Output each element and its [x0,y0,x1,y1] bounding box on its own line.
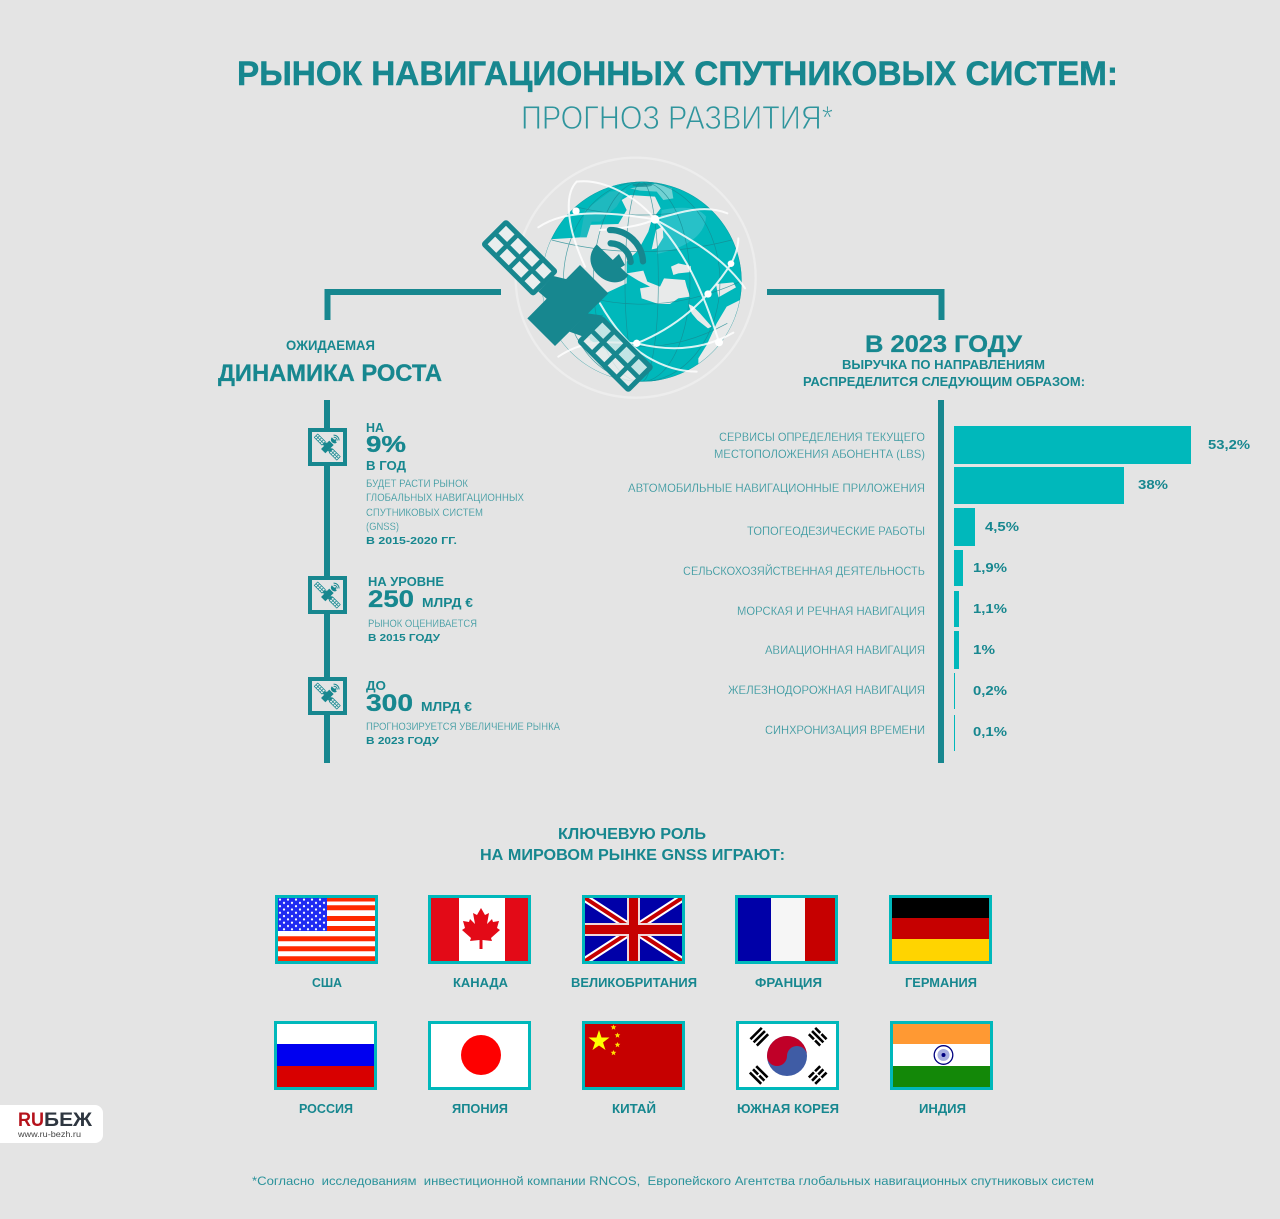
heading: key players: НА МИРОВОМ РЫНКЕ GNSS ИГРАЮТ: [480,847,785,864]
row: maritime: МОРСКАЯ И РЕЧНАЯ НАВИГАЦИЯ [737,604,925,618]
heading: growth dynamics [218,338,442,387]
title: ПРОГНОЗ РАЗВИТИЯ* [521,99,833,136]
row: agriculture [683,550,1007,586]
bracket: left connector [328,292,501,320]
row: geodesy: 4,5% [985,519,1019,534]
row: aviation: 1% [973,642,996,657]
text block: 250 bn euro: НА УРОВНЕ [368,574,444,589]
row: time sync [765,715,1007,751]
text block: 9% growth: НА [366,420,385,435]
orbits [538,181,745,372]
row: geodesy: ТОПОГЕОДЕЗИЧЕСКИЕ РАБОТЫ [747,524,925,538]
row: automotive: АВТОМОБИЛЬНЫЕ НАВИГАЦИОННЫЕ ПРИЛОЖЕНИЯ [628,481,925,495]
text block: 300 bn euro: В 2023 ГОДУ [366,735,440,747]
label: Germany: ГЕРМАНИЯ [905,975,977,990]
row: automotive [628,467,1168,504]
flag: China [584,1022,684,1088]
bracket: right connector [767,292,942,320]
text block: 9% growth: В 2015-2020 ГГ. [366,535,457,547]
text block: 300 bn euro: МЛРД € [421,699,472,714]
label: India: ИНДИЯ [919,1101,966,1116]
row: time sync: СИНХРОНИЗАЦИЯ ВРЕМЕНИ [765,723,925,737]
text block: 250 bn euro: МЛРД € [422,595,473,610]
label: USA: США [312,975,343,990]
text block: 300 bn euro: 300 [366,690,413,717]
text block: 9% growth: В ГОД [366,458,407,473]
row: automotive: 38% [1138,477,1168,492]
label: United Kingdom: ВЕЛИКОБРИТАНИЯ [571,975,697,990]
row: geodesy [747,508,1019,546]
row: agriculture: 1,9% [973,560,1007,575]
row: maritime: 1,1% [973,601,1007,616]
row: time sync: 0,1% [973,724,1007,739]
icon: satellite marker 3 [310,679,345,713]
icon: satellite marker 1 [310,430,345,464]
flag: Russia [276,1022,376,1088]
row: rail: ЖЕЛЕЗНОДОРОЖНАЯ НАВИГАЦИЯ [728,683,925,697]
land masses [538,195,661,383]
row: maritime [737,591,1007,627]
text block: 250 bn euro: 250 [368,586,414,613]
row: LBS: МЕСТОПОЛОЖЕНИЯ АБОНЕНТА (LBS) [714,447,925,461]
row: LBS: 53,2% [1208,437,1250,452]
text block: 9% growth: 9% [366,431,406,457]
row: rail [728,673,1007,709]
row: aviation [765,631,996,669]
title [237,55,1118,136]
heading: growth dynamics: ОЖИДАЕМАЯ [286,338,375,353]
icon: satellite marker 2 [310,578,345,612]
logo: Rubezh: БЕЖ [44,1110,93,1131]
globe [537,177,750,387]
label: South Korea: ЮЖНАЯ КОРЕЯ [737,1101,839,1116]
bar chart: revenue by segment [628,426,1250,751]
text block: 300 bn euro: ПРОГНОЗИРУЕТСЯ УВЕЛИЧЕНИЕ РЫНКА [366,721,561,733]
flag: United Kingdom [584,896,684,962]
timeline axis [324,400,330,763]
flag: Japan [430,1022,530,1088]
satellite [484,222,651,390]
row: rail: 0,2% [973,683,1007,698]
text block: 9% growth: СПУТНИКОВЫХ СИСТЕМ [366,507,483,519]
logo: Rubezh: www.ru-bezh.ru [17,1130,81,1139]
flag: Germany [890,896,990,962]
text block: 250 bn euro: РЫНОК ОЦЕНИВАЕТСЯ [368,618,477,630]
flag: Canada [430,896,530,962]
row: agriculture: СЕЛЬСКОХОЗЯЙСТВЕННАЯ ДЕЯТЕЛЬНОСТЬ [683,563,925,578]
text block: 250 bn euro [368,574,477,644]
label: Canada: КАНАДА [453,975,509,990]
row: aviation: АВИАЦИОННАЯ НАВИГАЦИЯ [765,643,925,657]
chart axis [938,400,944,763]
label: France: ФРАНЦИЯ [755,975,822,990]
heading: revenue in 2023 [803,331,1085,389]
graticule [542,182,742,382]
label: Japan: ЯПОНИЯ [452,1101,508,1116]
label: Russia: РОССИЯ [299,1101,353,1116]
heading: growth dynamics: ДИНАМИКА РОСТА [218,360,442,387]
row: LBS: СЕРВИСЫ ОПРЕДЕЛЕНИЯ ТЕКУЩЕГО [719,430,925,444]
flag: USA [276,896,376,962]
heading: revenue in 2023: В 2023 ГОДУ [865,331,1023,358]
heading: revenue in 2023: ВЫРУЧКА ПО НАПРАВЛЕНИЯМ [842,357,1045,372]
text block: 9% growth: БУДЕТ РАСТИ РЫНОК [366,478,469,490]
text block: 9% growth: ГЛОБАЛЬНЫХ НАВИГАЦИОННЫХ [366,492,525,504]
row: LBS [714,426,1250,464]
logo: Rubezh: RU [18,1110,44,1131]
text block: 9% growth [366,420,525,547]
text block: 9% growth: (GNSS) [366,521,399,533]
text block: 300 bn euro [366,678,561,747]
text block: 300 bn euro: ДО [366,678,386,693]
text block: 250 bn euro: В 2015 ГОДУ [368,632,441,644]
footnote: *Согласно исследованиям инвестиционной компании RNCOS, Европейского Агентства глобальных навигационных спутниковых систем [252,1174,1094,1188]
orbit nodes [572,207,734,347]
heading: key players: КЛЮЧЕВУЮ РОЛЬ [558,826,706,843]
flag: France [736,896,836,962]
flag: India [892,1022,992,1088]
logo: Rubezh [0,1105,103,1143]
label: China: КИТАЙ [612,1101,656,1116]
title: РЫНОК НАВИГАЦИОННЫХ СПУТНИКОВЫХ СИСТЕМ: [237,55,1118,93]
globe with satellite [484,158,756,398]
flag: South Korea [738,1022,838,1088]
heading: key players [480,826,785,864]
heading: revenue in 2023: РАСПРЕДЕЛИТСЯ СЛЕДУЮЩИМ ОБРАЗОМ: [803,374,1085,389]
